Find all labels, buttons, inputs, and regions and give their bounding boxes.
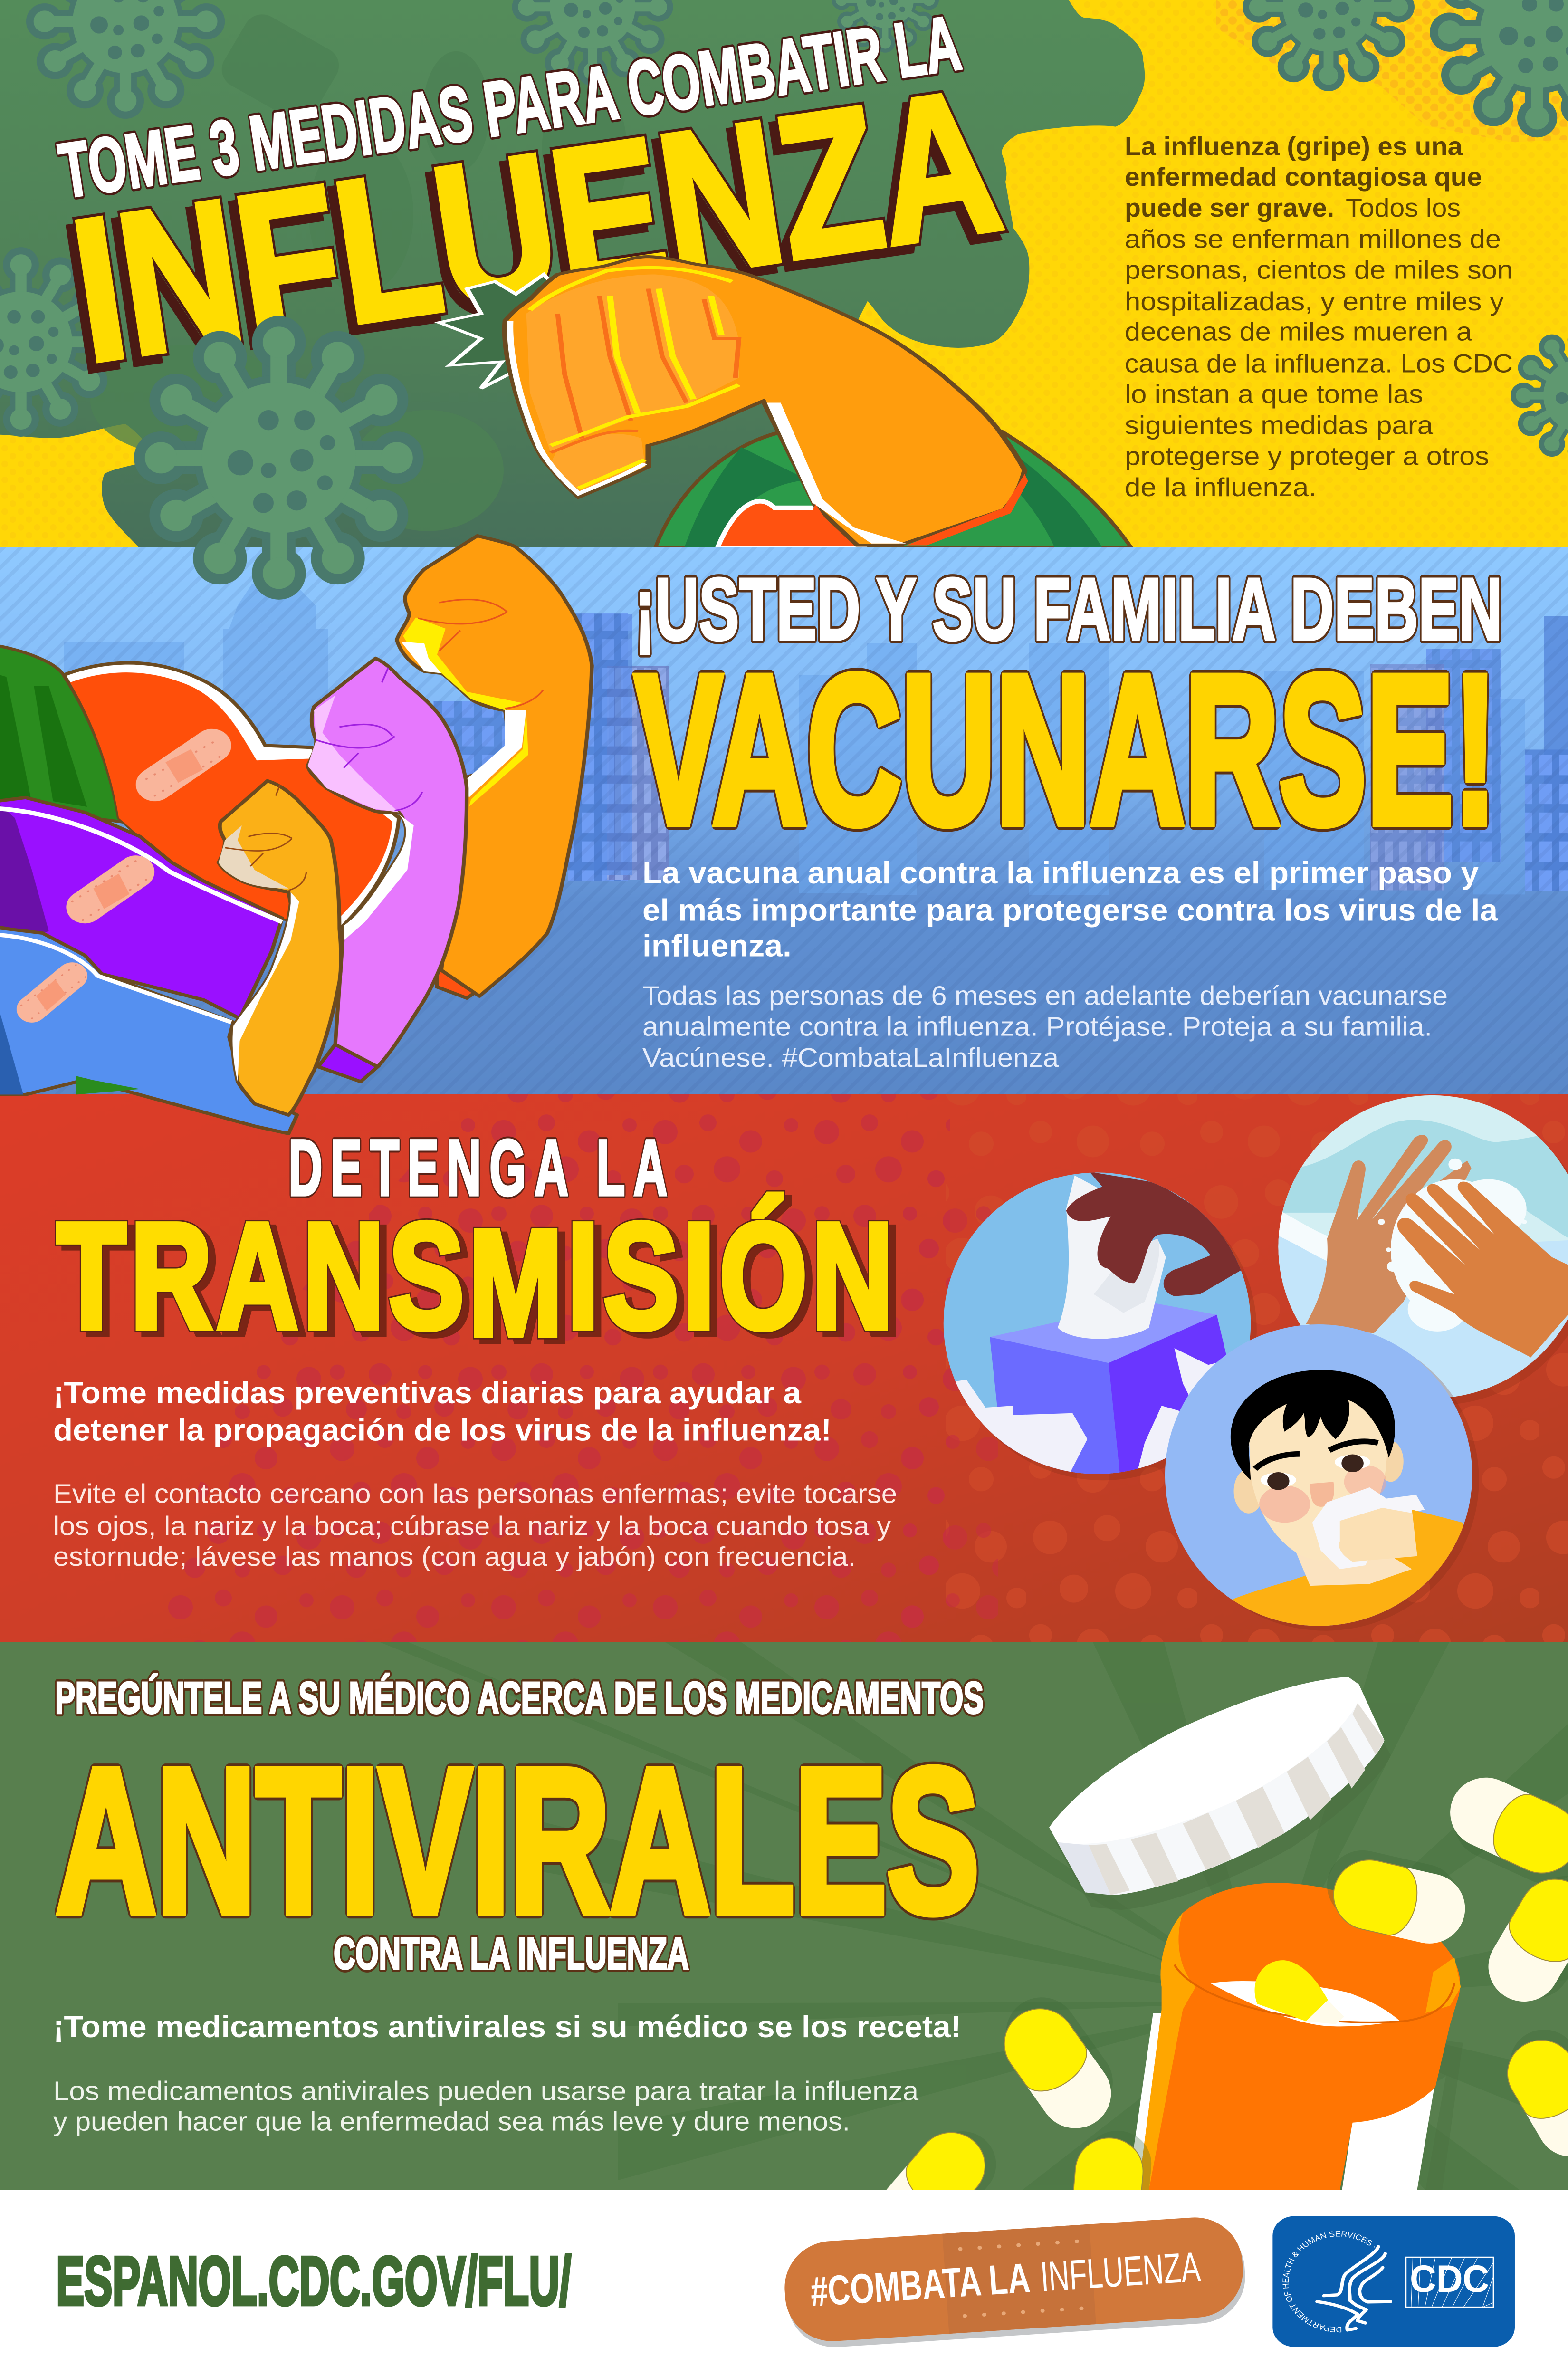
intro paragraph: Todos los: [1346, 193, 1461, 222]
vaccination text: anualmente contra la influenza. Protéjase. Proteja a su familia.: [642, 1012, 1432, 1042]
background rays: [380, 1642, 1568, 2191]
panel: stop transmission: [0, 1094, 1568, 1643]
heading: contra la influenza: CONTRA LA INFLUENZA: [334, 1929, 689, 1979]
title word: influenza: INFLUENZA: [60, 46, 1013, 404]
icon: impact starburst: [439, 275, 564, 389]
blue sleeve: [0, 928, 297, 1133]
antivirals text: y pueden hacer que la enfermedad sea más leve y dure menos.: [53, 2107, 850, 2136]
panel: antivirals: [0, 1642, 1568, 2265]
heading: contra la influenza: CONTRA LA INFLUENZA: [334, 1929, 689, 1979]
transmission text: [53, 1376, 897, 1572]
pink forearm: [307, 658, 467, 1082]
yellow forearm: [219, 781, 341, 1115]
fingers: [526, 275, 739, 452]
vaccination text: el más importante para protegerse contra los virus de la: [642, 893, 1498, 927]
vaccination text: influenza.: [642, 929, 792, 963]
logo: HHS and CDC: DEPARTMENT OF HEALTH & HUMAN SERVICES · USA: [1256, 2196, 1379, 2334]
intro paragraph: lo instan a que tome las: [1125, 380, 1423, 409]
intro paragraph: de la influenza.: [1125, 473, 1317, 502]
illustrations: prevention circles: [941, 1094, 1568, 1631]
antivirals text: Los medicamentos antivirales pueden usarse para tratar la influenza: [53, 2076, 918, 2106]
heading: transmision: ISIÓN: [574, 1197, 905, 1364]
circle: boy with tissue: [1162, 1320, 1497, 1631]
green blob: [0, 0, 1145, 548]
bandage: [146, 738, 223, 795]
green sleeve stripes: [0, 675, 87, 807]
heading: preguntele: PREGÚNTELE A SU MÉDICO ACERCA DE LOS MEDICAMENTOS: [55, 1673, 984, 1723]
heading: detenga la: [288, 1123, 676, 1212]
antivirals text: [53, 2010, 961, 2136]
transmission text: ¡Tome medidas preventivas diarias para ayudar a: [53, 1376, 802, 1410]
heading: transmision: M: [469, 1199, 567, 1367]
intro paragraph: La influenza (gripe) es una: [1125, 132, 1463, 161]
heading: preguntele: [55, 1673, 984, 1723]
intro paragraph: puede ser grave.: [1125, 193, 1334, 222]
illustration: pill bottle and cap: [1049, 1677, 1463, 2194]
illustration: punching fist: [439, 257, 1028, 546]
illustration: superhero shirt behind arm: [655, 431, 1131, 548]
illustration: flexing arms: [0, 342, 592, 1133]
circle: tissue box: [941, 1172, 1257, 1480]
intro paragraph: enfermedad contagiosa que: [1125, 163, 1482, 192]
bandage: [21, 965, 87, 1018]
intro paragraph: años se enferman millones de: [1125, 224, 1501, 253]
panel: footer: [0, 2190, 1568, 2376]
icons: capsules: [866, 1766, 1568, 2265]
heading: contra la influenza: [334, 1929, 689, 1979]
intro paragraph: protegerse y proteger a otros: [1125, 441, 1489, 470]
heading: antivirales: ANTIVIRALES: [56, 1726, 979, 1955]
panel: vaccination: [0, 547, 1568, 1095]
title word: influenza: INFLUENZA: [54, 54, 1006, 412]
circle: hand washing: [1276, 1094, 1568, 1406]
bandage hashtag: INFLUENZA: [1039, 2243, 1202, 2300]
heading: transmision: M: [469, 1199, 567, 1367]
intro paragraph: hospitalizadas, y entre miles y: [1125, 287, 1504, 316]
purple sleeve: [0, 797, 282, 1018]
CDC box: CDC: [1410, 2257, 1489, 2300]
eagle and faces: [1317, 2247, 1390, 2330]
transmission text: estornude; lávese las manos (con agua y jabón) con frecuencia.: [53, 1542, 856, 1572]
intro paragraph: causa de la influenza. Los CDC: [1125, 349, 1513, 378]
antivirals text: ¡Tome medicamentos antivirales si su médico se los receta!: [53, 2010, 961, 2044]
vaccination text: La vacuna anual contra la influenza es el primer paso y: [642, 855, 1479, 890]
intro paragraph: siguientes medidas para: [1125, 411, 1433, 440]
heading: transmision: M: [476, 1204, 574, 1371]
bandage hashtag: [782, 2214, 1248, 2350]
heading: antivirales: [56, 1726, 979, 1955]
title line: tome 3 medidas: [54, 0, 966, 214]
heading: antivirales: ANTIVIRALES: [56, 1726, 979, 1955]
green sleeve: [0, 645, 121, 822]
transmission text: detener la propagación de los virus de la influenza!: [53, 1413, 832, 1447]
heading: transmision: [57, 1192, 905, 1371]
intro paragraph: [1125, 132, 1513, 502]
heading: transmision: ISIÓN: [567, 1192, 898, 1360]
bandage hashtag: #COMBATA LA: [809, 2254, 1032, 2315]
heading: detenga la: DETENGA LA: [288, 1123, 676, 1212]
heading: preguntele: PREGÚNTELE A SU MÉDICO ACERCA DE LOS MEDICAMENTOS: [55, 1673, 984, 1723]
orange splash behind viruses: [1216, 0, 1568, 142]
background soft shapes: [90, 8, 627, 531]
bottle: [1128, 1883, 1463, 2194]
transmission text: Evite el contacto cercano con las personas enfermas; evite tocarse: [53, 1479, 897, 1509]
heading: transmision: ISIÓN: [567, 1192, 898, 1360]
title word: influenza: INFLUENZA: [60, 46, 1013, 404]
heading: transmision: TRANS: [57, 1192, 617, 1360]
cap: [1049, 1677, 1391, 1910]
heading: transmision: TRANS: [57, 1192, 617, 1360]
logo: HHS and CDC: [1256, 2196, 1515, 2347]
orange-red upper arm: [64, 663, 399, 929]
icon: viruses: [0, 0, 1568, 451]
intro paragraph: personas, cientos de miles son: [1125, 255, 1513, 284]
panel: top introduction: [0, 0, 1568, 548]
vaccination text: [642, 855, 1498, 1073]
vaccination text: Todas las personas de 6 meses en adelante deberían vacunarse: [642, 981, 1448, 1011]
forearm: [505, 257, 1024, 546]
bandage: [72, 857, 153, 920]
vaccination text: Vacúnese. #CombataLaInfluenza: [642, 1043, 1059, 1073]
intro paragraph: decenas de miles mueren a: [1125, 317, 1472, 346]
orange forearm: [397, 536, 592, 998]
heading: detenga la: DETENGA LA: [288, 1123, 676, 1212]
website url: ESPANOL.CDC.GOV/FLU/: [56, 2242, 571, 2320]
icon: large virus: [161, 342, 397, 573]
heading: transmision: TRANS: [64, 1197, 624, 1364]
white arm highlight: [767, 403, 906, 544]
city skyline: [64, 584, 1568, 895]
transmission text: los ojos, la nariz y la boca; cúbrase la nariz y la boca cuando tosa y: [53, 1511, 891, 1541]
